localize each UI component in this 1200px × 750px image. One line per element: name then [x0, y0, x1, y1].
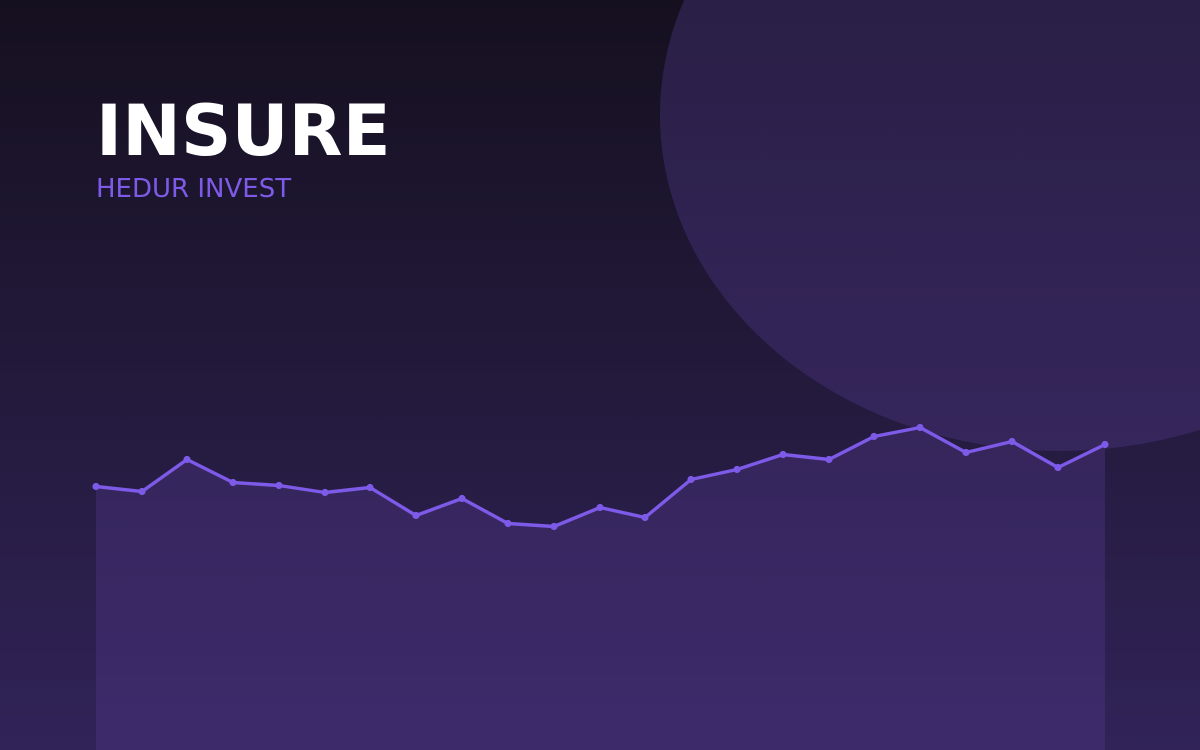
area fill — [96, 428, 1105, 750]
area chart — [92, 424, 1109, 750]
data points — [92, 424, 1109, 530]
line — [96, 428, 1105, 526]
decorative ellipse — [660, 0, 1200, 451]
title: INSURE — [96, 90, 391, 172]
subtitle: HEDUR INVEST — [96, 174, 291, 204]
